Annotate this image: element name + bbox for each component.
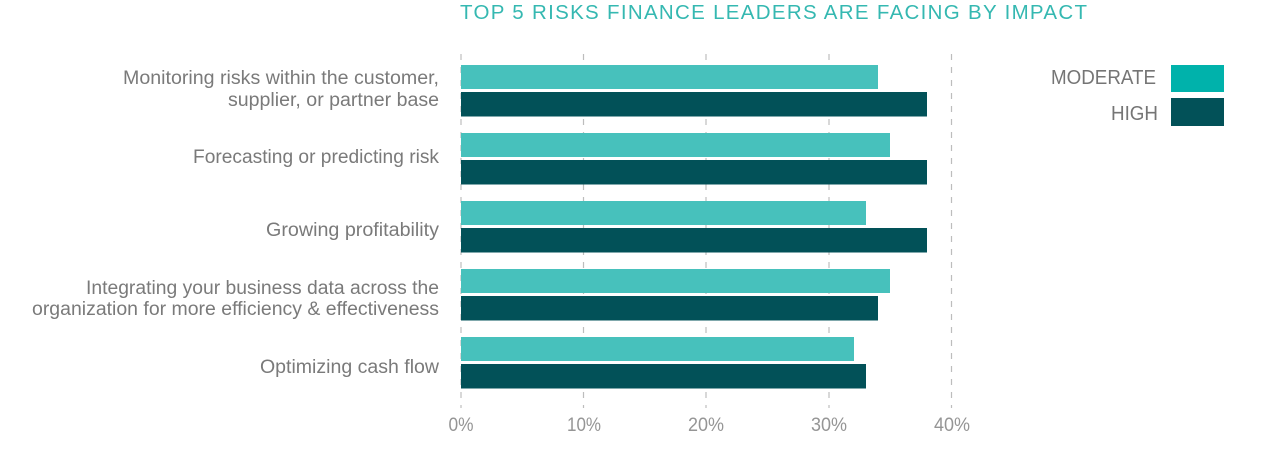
bar chart: [32, 65, 970, 436]
legend: MODERATE: [1051, 67, 1156, 89]
x axis labels: 40%: [934, 415, 970, 436]
category labels: Forecasting or predicting risk: [193, 147, 439, 168]
category labels: supplier, or partner base: [228, 90, 439, 111]
bars: moderate: [461, 65, 890, 361]
category labels: organization for more efficiency & effectiveness: [32, 299, 439, 320]
legend: HIGH: [1111, 103, 1158, 125]
x axis labels: 20%: [688, 415, 724, 436]
bars: high: [461, 92, 927, 388]
category labels: Optimizing cash flow: [260, 357, 439, 378]
x axis labels: 30%: [811, 415, 847, 436]
legend: [1051, 65, 1224, 126]
category labels: Growing profitability: [266, 220, 440, 241]
category labels: Integrating your business data across the: [86, 278, 439, 299]
category labels: Monitoring risks within the customer,: [123, 68, 439, 89]
title: TOP 5 RISKS FINANCE LEADERS ARE FACING BY IMPACT: [460, 1, 1087, 24]
x axis labels: [448, 415, 970, 436]
category labels: [32, 68, 440, 378]
x axis labels: 10%: [567, 415, 601, 436]
x axis labels: 0%: [448, 415, 474, 436]
